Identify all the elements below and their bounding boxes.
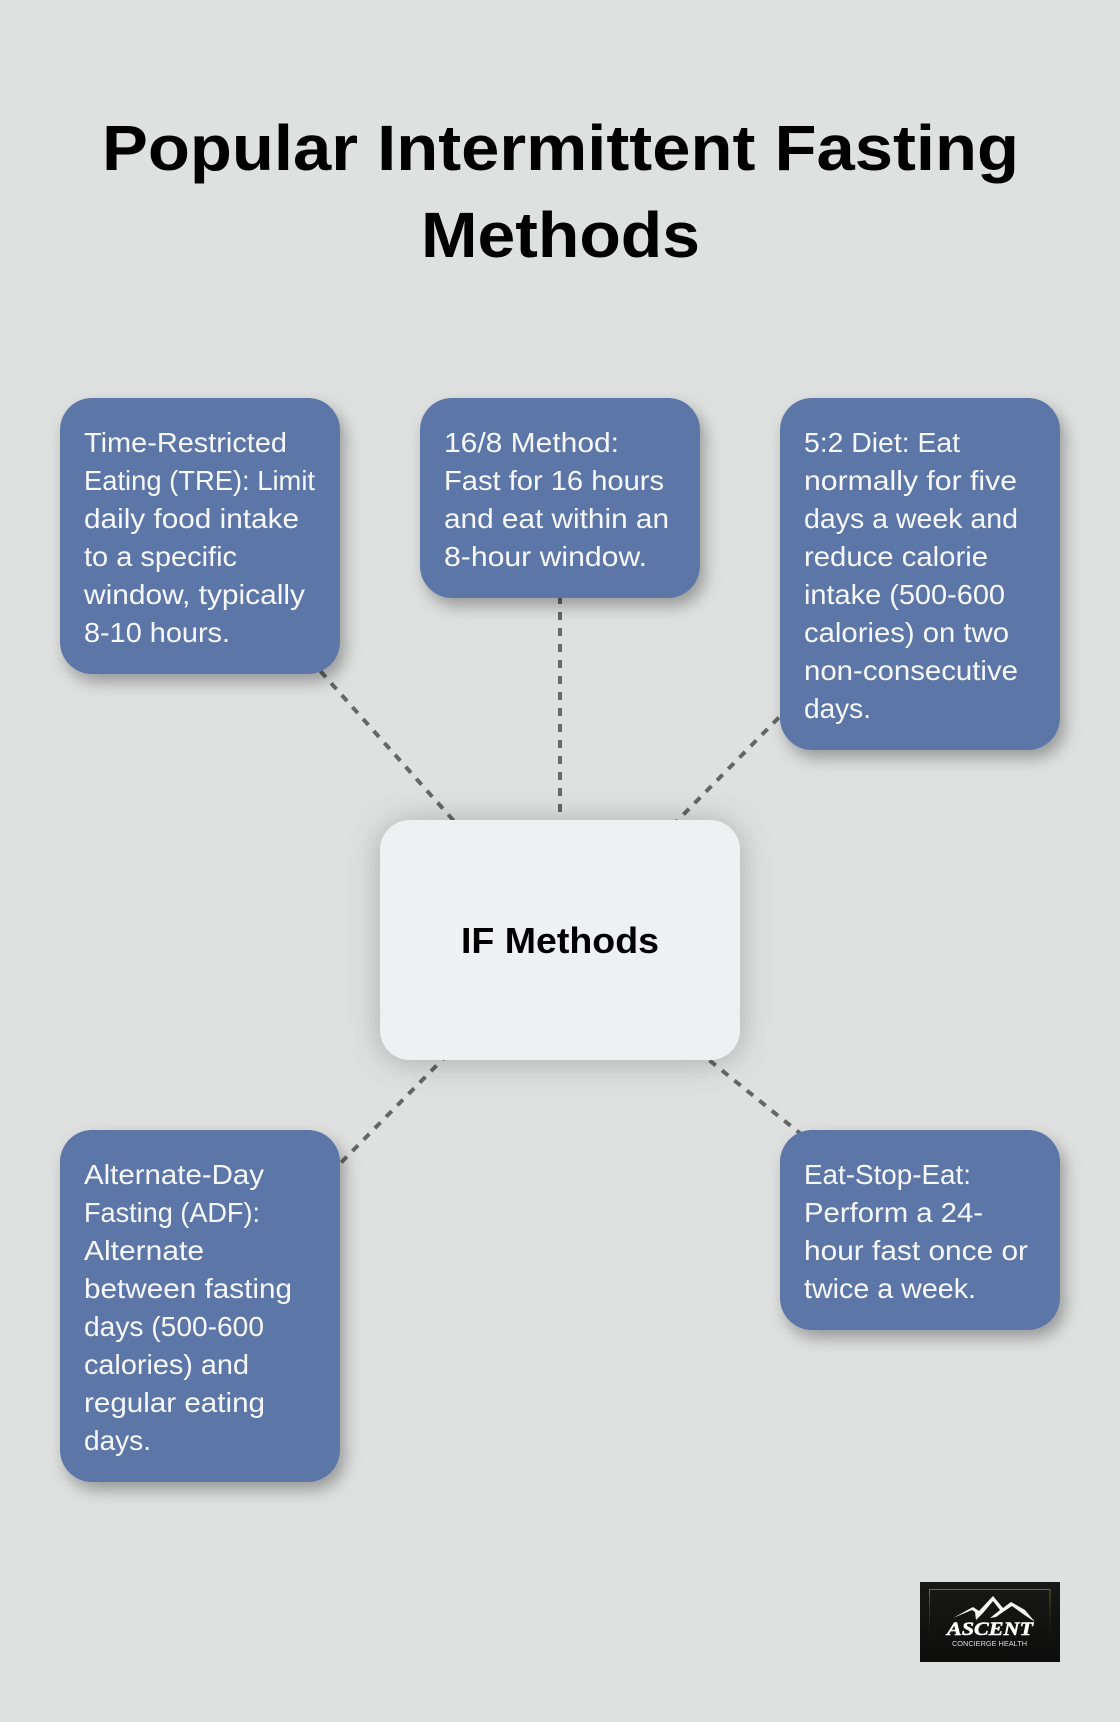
card: 5:2 Diet: reduce calorie — [804, 541, 988, 572]
card: Eat-Stop-Eat: hour fast once or — [804, 1235, 1028, 1266]
card: Time-Restricted Eating: to a specific — [84, 541, 237, 572]
card: 5:2 Diet: days. — [804, 693, 871, 724]
card: Alternate-Day Fasting: between fasting — [84, 1273, 292, 1304]
card: 16/8 Method: 8-hour window. — [444, 541, 647, 572]
card: Eat-Stop-Eat: Eat-Stop-Eat: — [804, 1159, 971, 1190]
card: Alternate-Day Fasting: days. — [84, 1425, 151, 1456]
title: Popular Intermittent Fasting — [102, 112, 1019, 184]
card: 5:2 Diet: 5:2 Diet: Eat — [804, 427, 960, 458]
card: 5:2 Diet: days a week and — [804, 503, 1018, 534]
card: Alternate-Day Fasting: regular eating — [84, 1387, 265, 1418]
card: Alternate-Day Fasting: Fasting (ADF): — [84, 1197, 260, 1228]
card: Alternate-Day Fasting: Alternate-Day — [84, 1159, 264, 1190]
card: 16/8 Method: and eat within an — [444, 503, 669, 534]
card: 16/8 Method: 16/8 Method: — [444, 427, 619, 458]
card: Alternate-Day Fasting: days (500-600 — [84, 1311, 264, 1342]
card: Time-Restricted Eating — [60, 398, 340, 674]
title: Methods — [421, 199, 700, 271]
card: Time-Restricted Eating: 8-10 hours. — [84, 617, 230, 648]
centre node: IF Methods: IF Methods — [461, 920, 659, 961]
card: Time-Restricted Eating: Eating (TRE): Limit — [84, 465, 315, 496]
card: Time-Restricted Eating: daily food intake — [84, 503, 299, 534]
card: 5:2 Diet: calories) on two — [804, 617, 1009, 648]
logo: Ascent Concierge Health — [920, 1582, 1060, 1662]
card: 16/8 Method — [420, 398, 700, 598]
logo: Ascent Concierge Health: CONCIERGE HEALTH — [952, 1641, 1027, 1648]
card: Alternate-Day Fasting — [60, 1130, 340, 1482]
card: 16/8 Method: Fast for 16 hours — [444, 465, 664, 496]
title — [102, 112, 1019, 271]
card: Eat-Stop-Eat: Perform a 24- — [804, 1197, 983, 1228]
card: 5:2 Diet: intake (500-600 — [804, 579, 1005, 610]
card: Time-Restricted Eating: Time-Restricted — [84, 427, 287, 458]
card: 5:2 Diet: non-consecutive — [804, 655, 1018, 686]
centre node: IF Methods — [380, 820, 740, 1060]
card: Time-Restricted Eating: window, typically — [83, 579, 305, 610]
card: Eat-Stop-Eat — [780, 1130, 1060, 1330]
card: 5:2 Diet: normally for five — [804, 465, 1017, 496]
card: Alternate-Day Fasting: calories) and — [84, 1349, 249, 1380]
card: Alternate-Day Fasting: Alternate — [84, 1235, 204, 1266]
logo: Ascent Concierge Health: ASCENT — [946, 1619, 1035, 1640]
card: 5:2 Diet — [780, 398, 1060, 750]
card: Eat-Stop-Eat: twice a week. — [804, 1273, 976, 1304]
dashed connectors from centre to each method card — [200, 498, 920, 1306]
